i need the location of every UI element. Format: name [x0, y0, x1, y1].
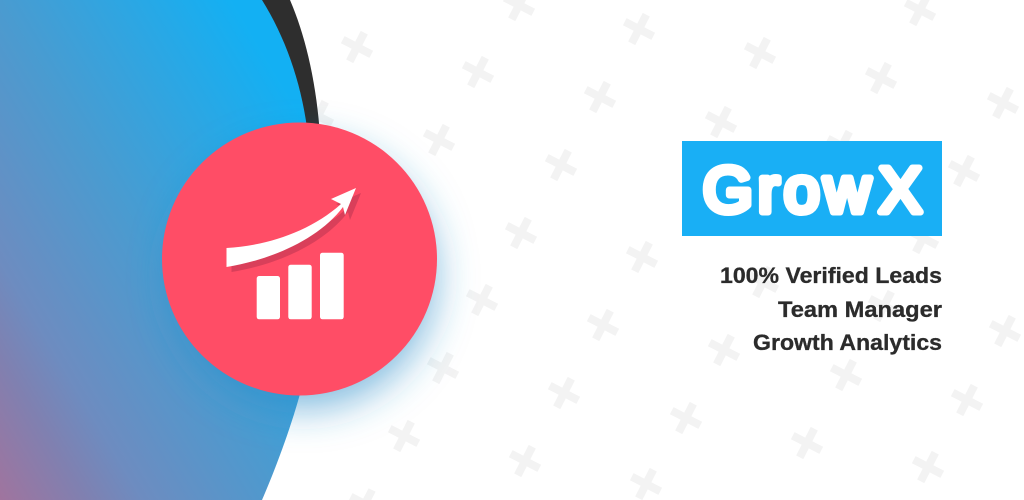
bar 2: [288, 265, 312, 319]
arrow shadow: [232, 193, 361, 272]
arrow: [226, 188, 356, 267]
feature: leads: 100% Verified Leads: [720, 263, 942, 288]
feature: team: Team Manager: [778, 297, 942, 322]
bar 1: [257, 276, 280, 319]
logo text: GrowX: [703, 154, 922, 226]
circle glow shadow: [171, 144, 435, 408]
feature: analytics: Growth Analytics: [753, 330, 942, 355]
logo box: [682, 141, 942, 236]
dark arc behind blue shape: [250, 0, 320, 135]
blue gradient shape: [0, 0, 312, 500]
bar 3: [320, 253, 344, 319]
feature list: [720, 263, 942, 355]
background plus pattern: [296, 0, 1024, 500]
red circle badge: [162, 122, 437, 396]
icon: growth arrow and bars: [226, 188, 361, 319]
